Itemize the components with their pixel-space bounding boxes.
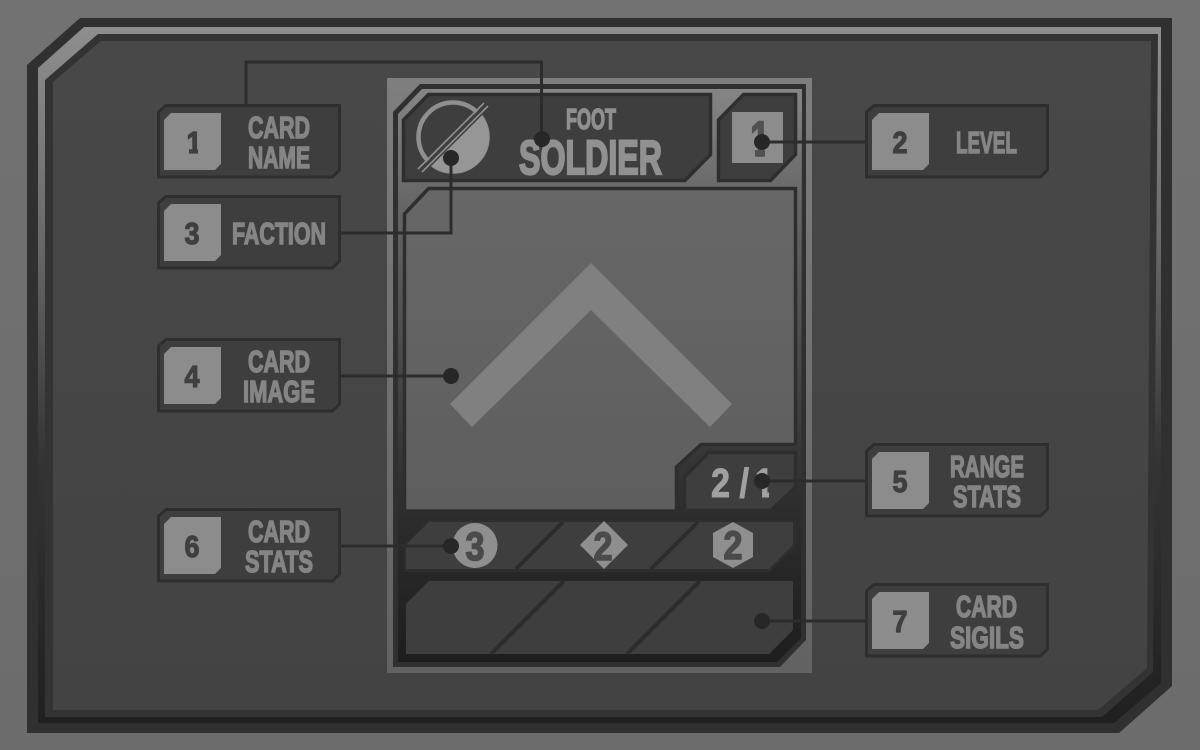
level number: 1 (750, 111, 770, 167)
badge 2 (872, 113, 929, 170)
label text 4: IMAGE (243, 374, 315, 409)
defence stat: 2 (594, 525, 612, 569)
badge 6 (164, 517, 221, 574)
number 3: 3 (184, 216, 200, 251)
callout 7: card sigils (754, 584, 1048, 656)
level panel (718, 94, 796, 180)
name panel (404, 94, 710, 185)
label text 5: RANGE (950, 449, 1024, 484)
label text 1: CARD (248, 110, 310, 145)
badge 5 (872, 452, 929, 509)
label box 4 (158, 340, 340, 411)
connector 5 (754, 473, 866, 489)
label text 6: CARD (248, 514, 310, 549)
label text 3: FACTION (232, 216, 326, 251)
attack stat (452, 523, 498, 569)
label text 4 (243, 344, 315, 409)
callout 3: faction (158, 150, 459, 268)
label box 7 (866, 584, 1048, 656)
callout 6: card stats (158, 510, 459, 581)
connector 4 (340, 368, 459, 384)
number 1: 1 (186, 125, 202, 160)
health stat: 2 (724, 524, 742, 568)
card frame (393, 84, 806, 667)
callout 4: card image (158, 340, 459, 411)
label box 6 (158, 510, 340, 581)
connector 3 (340, 150, 459, 233)
label text 4: CARD (248, 344, 310, 379)
range value: 1 (755, 460, 773, 506)
label box 5 (866, 444, 1048, 516)
badge 4 (164, 347, 221, 404)
label text 7 (950, 589, 1024, 655)
defence stat (580, 521, 628, 569)
badge 1 (164, 113, 221, 170)
number 7: 7 (892, 604, 908, 639)
label box 1 (158, 106, 340, 177)
label text 5 (950, 449, 1024, 514)
sigils bar (406, 581, 793, 654)
connector 7 (754, 613, 866, 629)
label text 6: STATS (245, 544, 313, 579)
range stats panel (684, 452, 796, 510)
badge 3 (164, 204, 221, 261)
connector 2 (754, 134, 866, 150)
stats bar (404, 520, 796, 572)
connector 6 (340, 538, 459, 554)
attack stat: 3 (466, 525, 484, 569)
label text 7: SIGILS (950, 620, 1024, 655)
badge 7 (872, 592, 929, 649)
chevron art (450, 263, 732, 427)
label text 2: LEVEL (956, 125, 1017, 160)
label text 1: NAME (248, 140, 310, 175)
card backing (387, 78, 812, 673)
health stat (713, 522, 753, 568)
card name text: SOLDIER (519, 132, 662, 185)
label text 6 (245, 514, 313, 579)
label box 2 (866, 106, 1048, 177)
number 2: 2 (892, 125, 908, 160)
card (387, 78, 812, 673)
callout 2: level (754, 106, 1048, 177)
label text 7: CARD (956, 589, 1017, 624)
label text 1 (248, 110, 310, 175)
connector 1 (246, 62, 550, 147)
callout 5: range stats (754, 444, 1048, 516)
card image panel (404, 188, 796, 511)
faction icon (417, 101, 489, 173)
level badge (732, 112, 783, 163)
callout 1: card name (158, 62, 550, 177)
number 5: 5 (892, 464, 908, 499)
number 4: 4 (184, 359, 200, 394)
card type text: FOOT (566, 104, 616, 136)
number 6: 6 (184, 529, 200, 564)
label text 5: STATS (953, 479, 1021, 514)
range value: 2 / (711, 460, 749, 506)
label box 3 (158, 196, 340, 268)
